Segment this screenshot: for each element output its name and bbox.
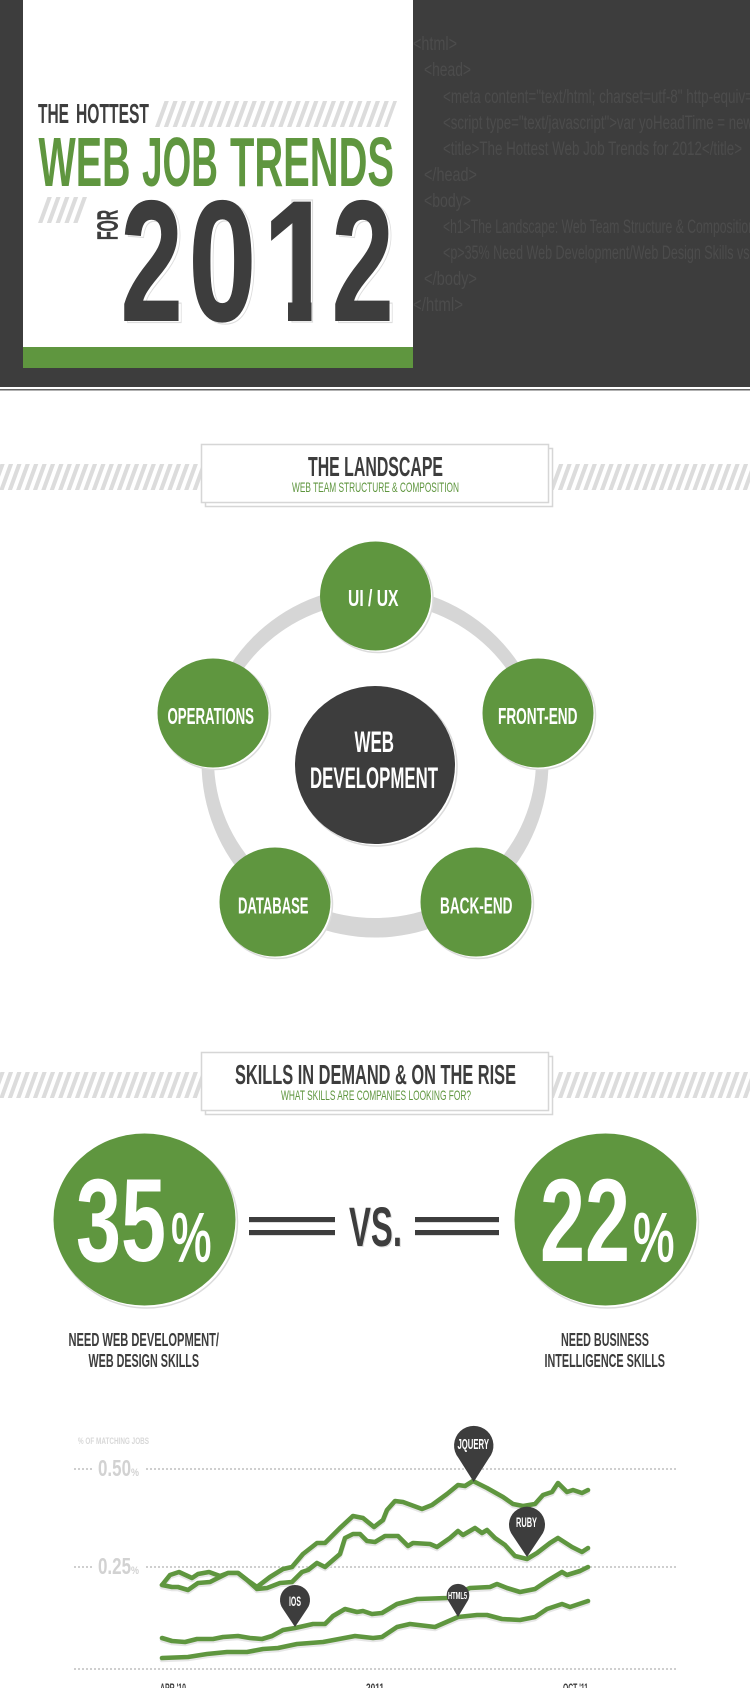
series: ruby [162, 1528, 588, 1592]
ring [202, 586, 548, 938]
series: ios [162, 1567, 588, 1644]
section heading: the landscape [0, 444, 750, 506]
pin: ios: IOS [289, 1593, 301, 1609]
node: ui ux: UI / UX [348, 585, 399, 611]
2012 digits [124, 200, 390, 323]
node: web development [295, 686, 457, 846]
2012 digits: 1 [263, 166, 334, 358]
node: ui ux [320, 542, 433, 652]
code listing background: <html> [413, 34, 457, 55]
y axis label: 0.50: 0.50 [98, 1455, 131, 1481]
line chart [74, 1426, 677, 1688]
versus divider: VS. [349, 1195, 402, 1258]
label: WEB DESIGN SKILLS [88, 1350, 199, 1371]
stat: 35 percent [54, 1134, 238, 1371]
2012 shadow: 0 [192, 168, 259, 360]
pin: ruby [509, 1507, 545, 1557]
2012 shadow: 2 [124, 168, 186, 360]
label [68, 1329, 219, 1371]
code listing background: <head> [424, 60, 471, 81]
2012 digits: 2 [121, 166, 183, 358]
series: jquery [162, 1481, 588, 1589]
title: THE LANDSCAPE [308, 451, 443, 482]
2012 digits: 0 [189, 166, 256, 358]
pin: html5 [447, 1584, 469, 1617]
node: front-end: FRONT-END [498, 703, 578, 729]
panel: title card: FOR [92, 210, 124, 240]
code listing background: </head> [424, 165, 477, 186]
panel: title card [23, 0, 413, 368]
pin: html5: HTML5 [448, 1591, 467, 1602]
heading: web job trends [38, 123, 394, 201]
subtitle: WHAT SKILLS ARE COMPANIES LOOKING FOR? [281, 1087, 471, 1103]
label: NEED BUSINESS [561, 1329, 649, 1350]
node: web development: DEVELOPMENT [310, 762, 438, 795]
subtitle: WEB TEAM STRUCTURE & COMPOSITION [292, 479, 459, 495]
x axis labels [160, 1681, 588, 1688]
heading: the hottest [38, 98, 149, 129]
code listing background: </body> [424, 269, 477, 290]
pin: ios [280, 1585, 310, 1627]
node: front-end [482, 658, 596, 770]
node: database: DATABASE [238, 892, 308, 918]
code listing background [413, 34, 750, 316]
node: database [220, 848, 332, 958]
axis title: % OF MATCHING JOBS [78, 1436, 149, 1447]
section heading: skills in demand [0, 1052, 750, 1114]
panel: dark header [0, 0, 750, 390]
node: operations [158, 658, 270, 770]
code listing background: <body> [424, 191, 471, 212]
title: SKILLS IN DEMAND & ON THE RISE [235, 1059, 516, 1090]
stat: 22 percent: 22 [540, 1155, 630, 1287]
code listing background: </html> [413, 295, 463, 316]
stat: 35 percent: 35 [76, 1155, 166, 1287]
heading: web job trends: TRENDS [230, 123, 394, 201]
heading: the hottest: HOTTEST [76, 98, 149, 129]
heading: the hottest: THE [38, 98, 69, 129]
stat: 22 percent: % [633, 1199, 674, 1276]
y axis label: 0.25: % [131, 1565, 139, 1577]
versus divider [249, 1195, 499, 1259]
versus divider: VS. [350, 1196, 403, 1259]
2012 shadow: 2 [335, 168, 397, 360]
label: NEED WEB DEVELOPMENT/ [68, 1329, 219, 1350]
pin: ruby: RUBY [516, 1515, 537, 1530]
y axis label: 0.25: 0.25 [98, 1553, 131, 1579]
heading: web job trends: WEB [38, 123, 130, 201]
stat: 35 percent: % [171, 1199, 212, 1276]
node: operations: OPERATIONS [168, 703, 254, 729]
node: back-end: BACK-END [440, 892, 512, 918]
2012 shadow [124, 168, 397, 360]
stat: 22 percent [514, 1134, 698, 1371]
pin: jquery [454, 1426, 493, 1482]
heading: web job trends: JOB [142, 123, 218, 201]
stripes: top [160, 101, 392, 127]
y axis label: 0.50: % [131, 1467, 139, 1479]
label: INTELLIGENCE SKILLS [544, 1350, 665, 1371]
2012 digits: 2 [332, 166, 394, 358]
label [544, 1329, 665, 1371]
node: web development: WEB [354, 726, 394, 759]
heading: 2012 [124, 200, 392, 325]
stripes: small [43, 197, 83, 223]
pin: jquery: JQUERY [458, 1437, 489, 1453]
series: html5 [162, 1601, 588, 1660]
node: back-end [420, 848, 534, 958]
diagram: web team wheel [158, 542, 596, 958]
